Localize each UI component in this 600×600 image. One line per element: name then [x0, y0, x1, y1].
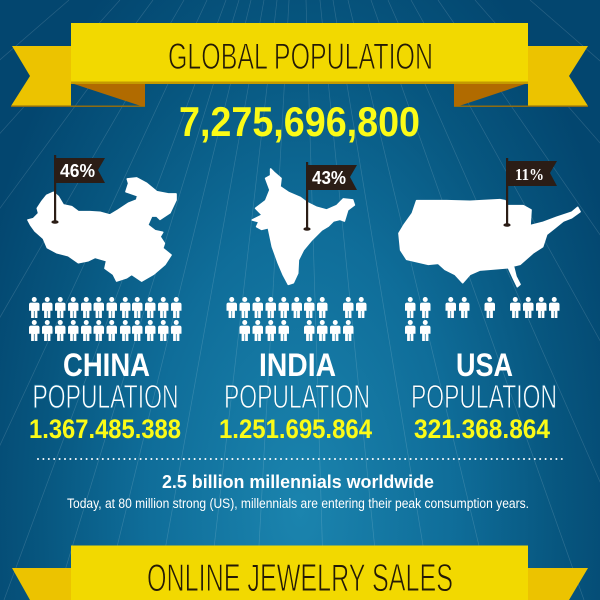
stats: China: 1.367.485.388 — [29, 414, 181, 444]
people icons: USA — [405, 297, 560, 341]
flag: India 43%: 43% — [312, 168, 346, 188]
flag: India 43% — [303, 162, 357, 231]
people icons: China — [29, 297, 182, 341]
stats: USA: 321.368.864 — [414, 414, 550, 444]
stats: India — [219, 347, 372, 444]
stats: USA — [411, 347, 557, 444]
bottom ribbon banner — [12, 546, 588, 600]
flag: China 46%: 46% — [60, 161, 95, 181]
map: China — [28, 178, 176, 281]
stats: India: INDIA — [259, 347, 336, 383]
stats: USA: USA — [456, 347, 513, 383]
flag: China 46% — [51, 155, 105, 224]
total population number: 7,275,696,800 — [179, 98, 420, 145]
stats: India: 1.251.695.864 — [219, 414, 372, 444]
flag: USA 11% — [503, 158, 557, 227]
millennials heading: 2.5 billion millennials worldwide — [162, 471, 434, 492]
map: India — [252, 169, 354, 284]
people icons: India — [226, 297, 366, 341]
stats: China: POPULATION — [32, 379, 178, 416]
flag: USA 11%: 11% — [515, 165, 544, 184]
stats: India: POPULATION — [224, 379, 370, 416]
millennials description: Today, at 80 million strong (US), millennials are entering their peak consumption years. — [67, 496, 529, 511]
title: global population: GLOBAL POPULATION — [168, 35, 433, 77]
top ribbon banner — [11, 23, 588, 107]
stats: China: CHINA — [63, 347, 150, 383]
map: USA — [399, 200, 580, 287]
stats: China — [29, 347, 181, 444]
